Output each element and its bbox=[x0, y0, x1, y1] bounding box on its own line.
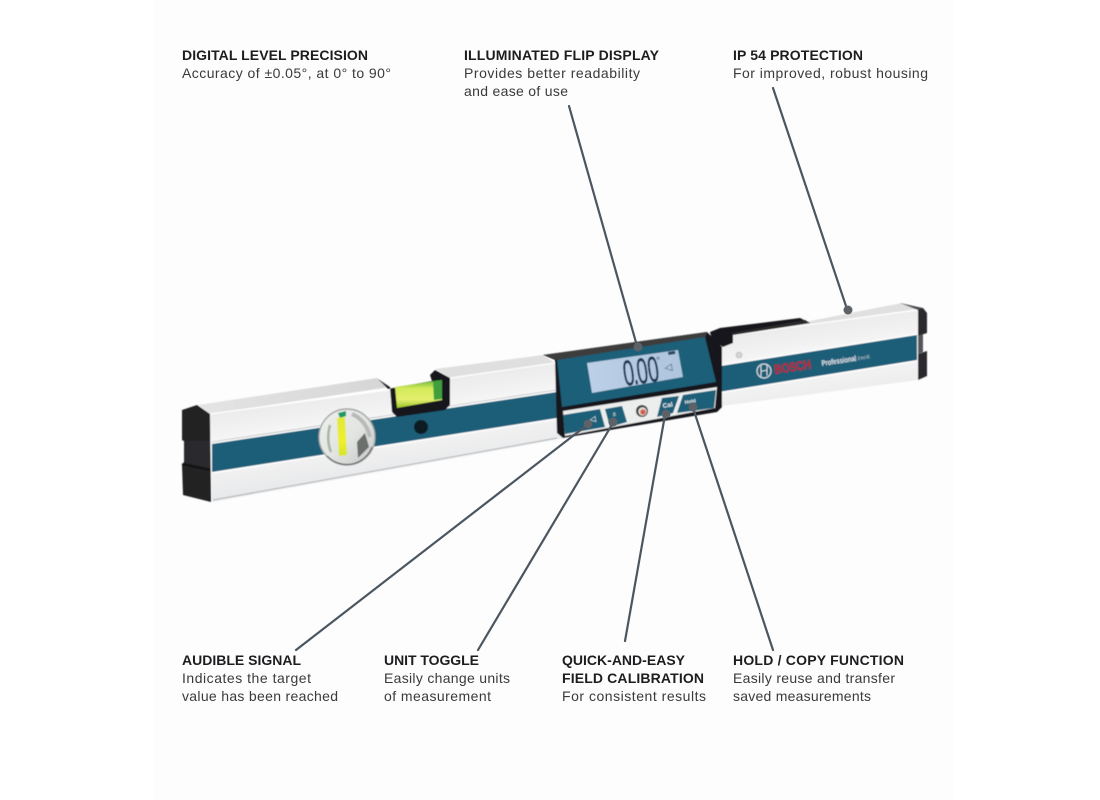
LCD screen bbox=[587, 350, 683, 395]
level top face, right section bbox=[733, 303, 918, 335]
callout: quick-and-easy field calibration: FIELD CALIBRATION bbox=[562, 670, 704, 686]
LCD speaker symbol: ◁ bbox=[664, 362, 673, 374]
callout: unit toggle: Easily change units bbox=[384, 670, 510, 686]
button: unit toggle: ± bbox=[612, 411, 617, 418]
callout: quick-and-easy field calibration: For consistent results bbox=[562, 688, 706, 704]
power button bbox=[636, 405, 648, 417]
Bosch brand bbox=[757, 354, 870, 378]
flip hinge bbox=[710, 318, 810, 347]
button: unit toggle bbox=[605, 406, 627, 427]
display unit bbox=[543, 332, 722, 438]
model label: D-tect 60 bbox=[857, 354, 870, 362]
leader: unit toggle bbox=[478, 418, 618, 650]
callout: digital level precision bbox=[182, 47, 391, 81]
leader: audible signal bbox=[296, 420, 592, 650]
callout: audible signal bbox=[182, 652, 338, 704]
callout: illuminated flip display: and ease of use bbox=[464, 83, 568, 99]
LCD reading: 0.00 bbox=[620, 350, 662, 395]
callout: unit toggle bbox=[384, 652, 510, 704]
callout: unit toggle: of measurement bbox=[384, 688, 491, 704]
Bosch logo mark bbox=[757, 364, 771, 378]
level edge highlights bbox=[210, 390, 388, 414]
callout: audible signal: Indicates the target bbox=[182, 670, 311, 686]
callout: quick-and-easy field calibration bbox=[562, 652, 706, 704]
left end cap bbox=[182, 405, 211, 502]
callout: illuminated flip display: ILLUMINATED FLIP DISPLAY bbox=[464, 47, 660, 63]
leader: hold / copy function bbox=[688, 402, 773, 650]
callout: illuminated flip display bbox=[464, 47, 660, 99]
button: audible signal bbox=[563, 409, 605, 434]
callout: digital level precision: DIGITAL LEVEL PRECISION bbox=[182, 47, 368, 63]
level teal stripe bbox=[212, 335, 917, 472]
level top face, middle section bbox=[435, 355, 555, 378]
button: calibration: Cal bbox=[662, 401, 673, 410]
callout: illuminated flip display: Provides better readability bbox=[464, 65, 640, 81]
button: audible signal: ◁ bbox=[589, 414, 597, 424]
callout: quick-and-easy field calibration: QUICK-AND-EASY bbox=[562, 652, 686, 668]
callout: audible signal: AUDIBLE SIGNAL bbox=[182, 652, 301, 668]
product: digital level bbox=[182, 303, 927, 502]
leader: illuminated flip display bbox=[569, 106, 642, 352]
LCD degree sign: ° bbox=[656, 355, 661, 367]
callout: audible signal: value has been reached bbox=[182, 688, 338, 704]
front-face screw bbox=[736, 352, 742, 358]
button: calibration bbox=[657, 396, 679, 417]
Professional label: Professional bbox=[821, 354, 857, 368]
leader: IP 54 protection bbox=[773, 88, 852, 314]
leader: field calibration bbox=[625, 410, 670, 641]
level top face, left section bbox=[198, 378, 390, 414]
callout: hold / copy function: Easily reuse and transfer bbox=[733, 670, 895, 686]
level front face bbox=[210, 309, 918, 502]
right end cap bbox=[900, 303, 927, 380]
round vial bbox=[319, 409, 375, 465]
callout: hold / copy function: HOLD / COPY FUNCTION bbox=[733, 652, 904, 668]
button: hold: Hold bbox=[684, 398, 696, 406]
callout: IP 54 protection: IP 54 PROTECTION bbox=[733, 47, 863, 63]
button: hold bbox=[677, 390, 716, 413]
background panel bbox=[153, 0, 953, 800]
display teal face bbox=[557, 337, 716, 407]
callout: hold / copy function bbox=[733, 652, 904, 704]
callout: hold / copy function: saved measurements bbox=[733, 688, 871, 704]
callout: unit toggle: UNIT TOGGLE bbox=[384, 652, 479, 668]
display housing bbox=[543, 332, 722, 438]
callout: digital level precision: Accuracy of ±0.05°, at 0° to 90° bbox=[182, 65, 391, 81]
callout: IP 54 protection: For improved, robust housing bbox=[733, 65, 928, 81]
Bosch wordmark: BOSCH bbox=[773, 357, 812, 377]
mounting hole bbox=[414, 420, 428, 434]
horizontal vial bbox=[378, 370, 450, 417]
callout: IP 54 protection bbox=[733, 47, 928, 81]
button strip bbox=[563, 387, 717, 436]
